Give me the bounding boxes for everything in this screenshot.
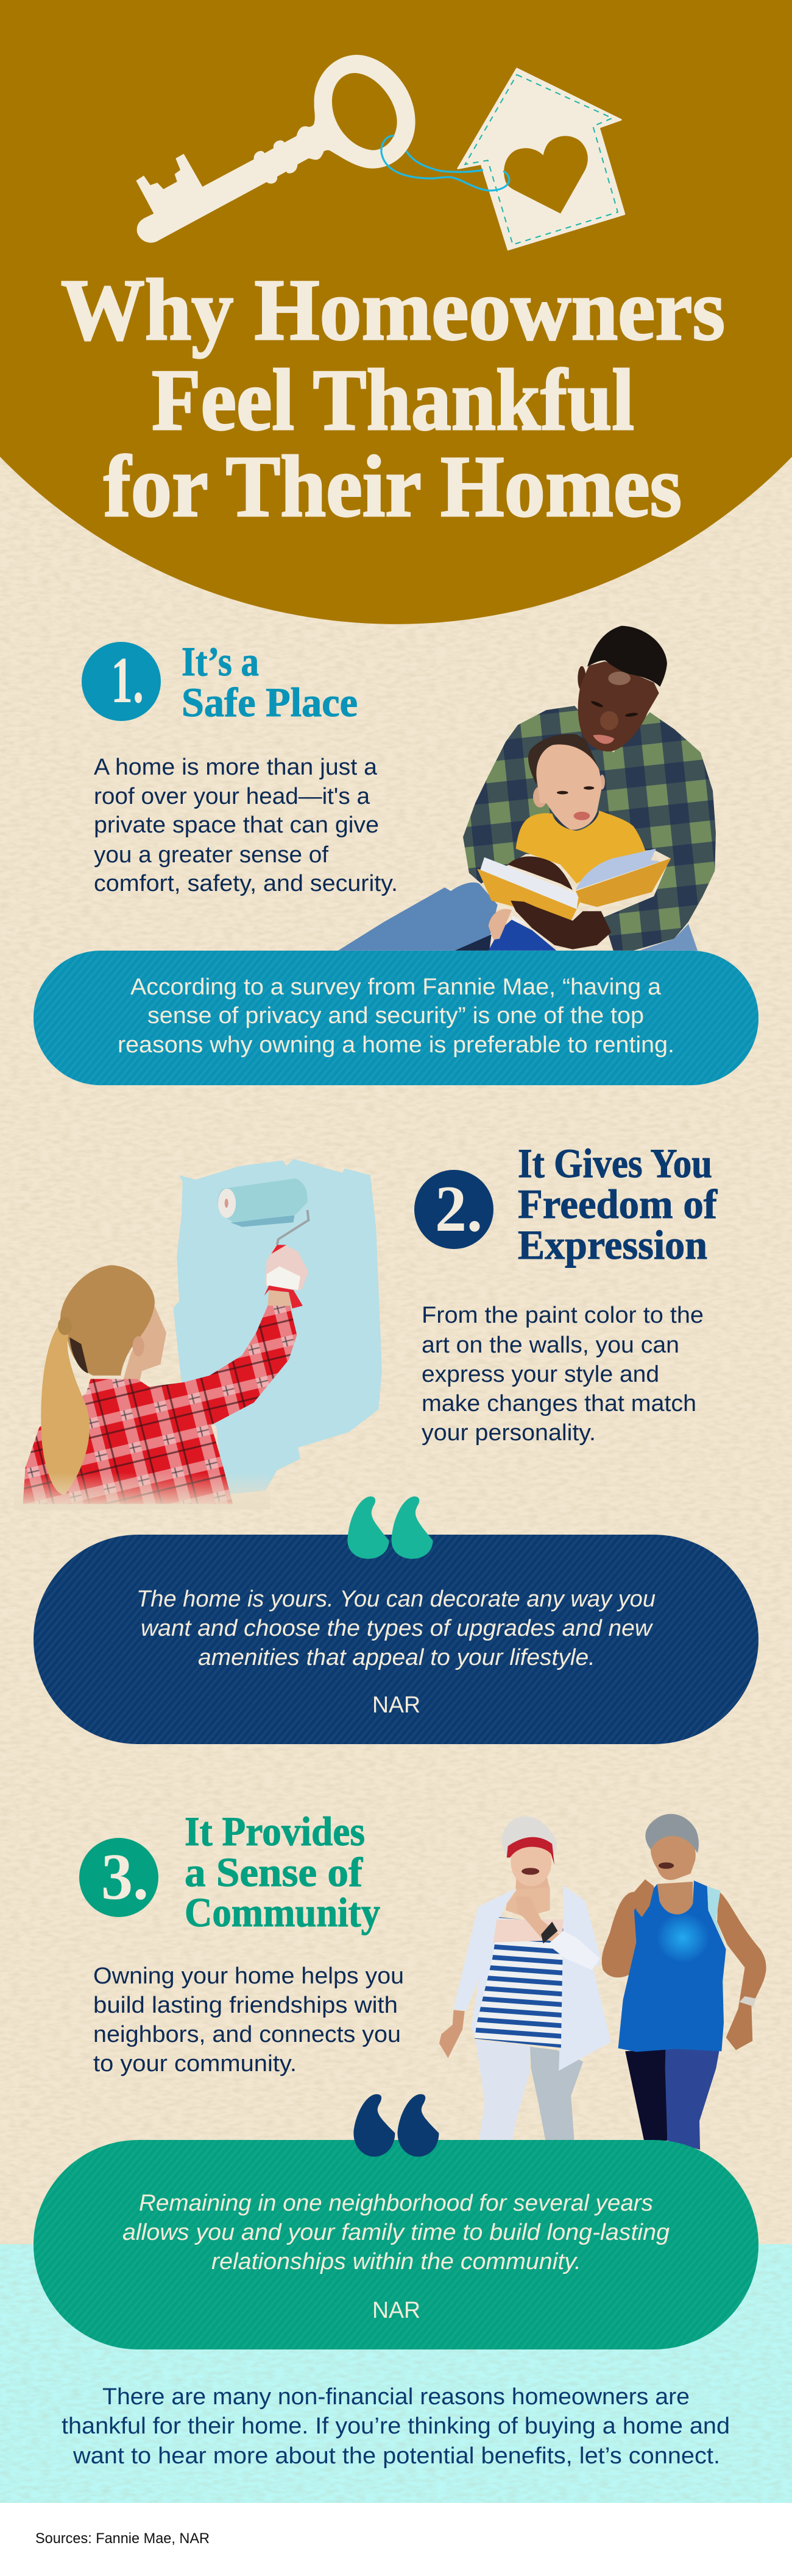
section 1 body text: you a greater sense of bbox=[94, 842, 328, 868]
title: Feel Thankful bbox=[152, 352, 634, 449]
section 1 number badge bbox=[82, 642, 161, 721]
icon: stitching bbox=[465, 75, 618, 245]
section 3 body text bbox=[93, 1963, 404, 2077]
section 3 body text: Owning your home helps you bbox=[93, 1963, 404, 1989]
section 2 body text bbox=[422, 1303, 704, 1446]
callout: NAR quote on decorating: amenities that appeal to your lifestyle. bbox=[198, 1645, 595, 1670]
callout: Fannie Mae survey bbox=[34, 951, 758, 1085]
section 3 heading: a Sense of bbox=[185, 1849, 363, 1895]
section 1 number badge: 1. bbox=[111, 644, 144, 717]
callout: Fannie Mae survey: sense of privacy and security” is one of the top bbox=[147, 1003, 644, 1029]
section 3 body text: build lasting friendships with bbox=[93, 1993, 398, 2018]
icon: navy quotation mark bbox=[353, 2094, 439, 2156]
section 3 heading: It Provides bbox=[185, 1808, 365, 1854]
callout: NAR quote on community: NAR bbox=[372, 2298, 420, 2323]
callout: Fannie Mae survey: According to a survey from Fannie Mae, “having a bbox=[130, 974, 662, 1000]
callout: NAR quote on community: relationships within the community. bbox=[211, 2249, 581, 2275]
title bbox=[61, 262, 725, 535]
icon: heart cutout bbox=[504, 136, 588, 214]
callout: NAR quote on community: Remaining in one neighborhood for several years bbox=[139, 2191, 653, 2216]
title: for Their Homes bbox=[104, 438, 682, 535]
section 1 heading bbox=[182, 638, 358, 725]
section 3 heading bbox=[185, 1808, 380, 1935]
photo: father reading with child bbox=[338, 626, 716, 951]
closing text: want to hear more about the potential benefits, let’s connect. bbox=[72, 2443, 720, 2469]
callout: NAR quote on decorating: NAR bbox=[372, 1692, 420, 1718]
icon: key bbox=[136, 55, 415, 243]
section 1 body text: private space that can give bbox=[94, 812, 379, 838]
header: brown circle bbox=[0, 0, 792, 624]
section 1 body text bbox=[94, 755, 398, 896]
section 3 body text: to your community. bbox=[93, 2051, 297, 2077]
callout: NAR quote on decorating: want and choose the types of upgrades and new bbox=[141, 1616, 654, 1641]
background: aqua band bbox=[0, 2244, 792, 2503]
section 2 body text: your personality. bbox=[422, 1420, 596, 1446]
section 1 body text: A home is more than just a bbox=[94, 755, 378, 780]
closing text: There are many non-financial reasons homeowners are bbox=[102, 2384, 690, 2410]
section 1 body text: comfort, safety, and security. bbox=[94, 871, 398, 896]
sources: Sources: Fannie Mae, NAR bbox=[35, 2530, 210, 2547]
section 2 heading: Expression bbox=[518, 1222, 707, 1268]
icon: house tag bbox=[458, 69, 624, 250]
callout: NAR quote on community: allows you and your family time to build long-lasting bbox=[122, 2220, 670, 2245]
icon: blue string bbox=[381, 136, 509, 191]
section 2 number badge: 2. bbox=[435, 1173, 483, 1245]
callout: NAR quote on community bbox=[34, 2140, 758, 2349]
section 1 heading: It’s a bbox=[182, 638, 259, 684]
section 3 body text: neighbors, and connects you bbox=[93, 2022, 401, 2047]
photo: woman painting wall bbox=[13, 1159, 382, 1510]
section 1 body text: roof over your head—it's a bbox=[94, 784, 370, 809]
section 3 number badge: 3. bbox=[101, 1841, 149, 1913]
background: white footer bbox=[0, 2503, 792, 2576]
section 2 heading bbox=[518, 1140, 718, 1268]
section 2 body text: make changes that match bbox=[422, 1391, 696, 1416]
closing text: thankful for their home. If you’re thinking of buying a home and bbox=[62, 2413, 730, 2439]
title: Why Homeowners bbox=[61, 262, 725, 359]
section 2 number badge bbox=[414, 1170, 493, 1249]
callout: NAR quote on decorating: The home is yours. You can decorate any way you bbox=[136, 1586, 656, 1612]
section 3 heading: Community bbox=[185, 1889, 380, 1935]
callout: NAR quote on decorating bbox=[34, 1535, 758, 1744]
closing text bbox=[62, 2384, 730, 2469]
section 2 heading: Freedom of bbox=[518, 1181, 718, 1227]
section 3 number badge bbox=[79, 1838, 158, 1917]
icon: teal quotation mark bbox=[347, 1496, 433, 1559]
section 2 body text: art on the walls, you can bbox=[422, 1332, 679, 1358]
section 2 heading: It Gives You bbox=[518, 1140, 712, 1186]
section 2 body text: express your style and bbox=[422, 1362, 659, 1387]
callout: Fannie Mae survey: reasons why owning a home is preferable to renting. bbox=[118, 1032, 674, 1058]
section 2 body text: From the paint color to the bbox=[422, 1303, 704, 1328]
photo: two women walking bbox=[439, 1814, 766, 2150]
section 1 heading: Safe Place bbox=[182, 679, 358, 725]
